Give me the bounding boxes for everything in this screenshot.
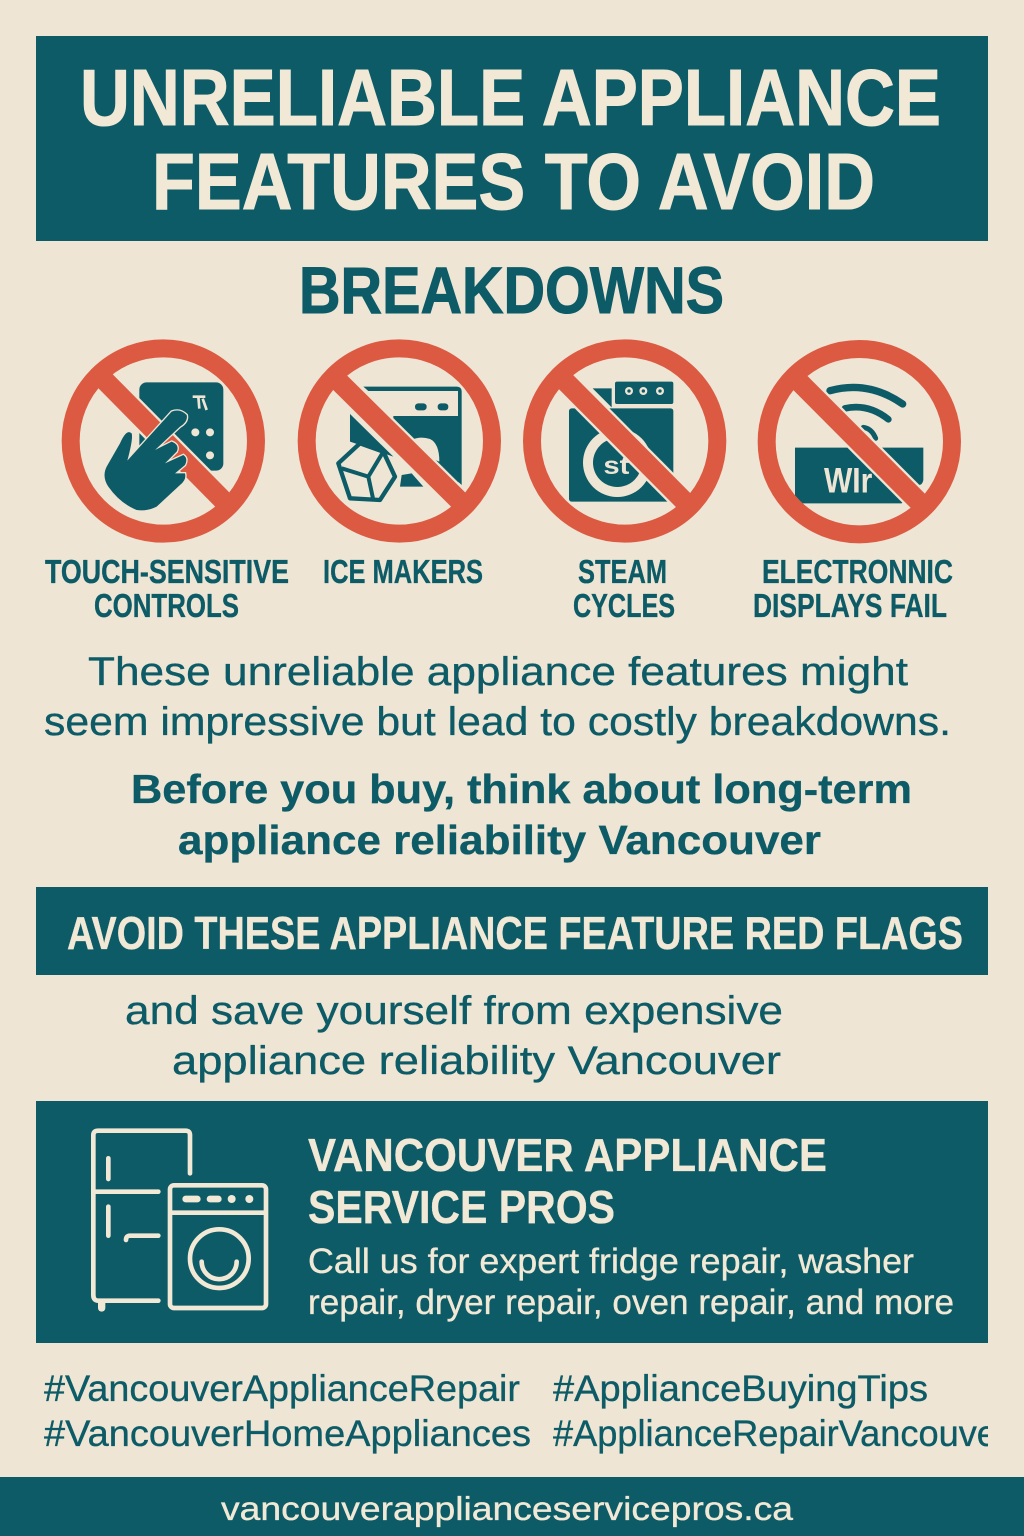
text block: intro paragraph: seem impressive but lead to costly breakdowns.: [44, 700, 951, 744]
text block: save yourself: and save yourself from expensive: [125, 989, 783, 1033]
icon: ice makers prohibited: [307, 348, 492, 534]
icon: touch-sensitive controls prohibited: [71, 348, 256, 534]
text block: intro paragraph: These unreliable appliance features might: [88, 650, 908, 694]
label: steam cycles: STEAM: [578, 553, 667, 590]
label: touch-sensitive controls: TOUCH-SENSITIVE: [45, 553, 289, 590]
panel heading: [308, 1129, 827, 1233]
label: ice makers: ICE MAKERS: [323, 553, 483, 590]
panel heading: VANCOUVER APPLIANCE: [308, 1129, 827, 1181]
hashtags: #ApplianceBuyingTips: [553, 1368, 928, 1409]
footer band with website: [0, 1477, 1024, 1536]
text block: save yourself: [125, 989, 783, 1083]
label: steam cycles: [573, 553, 675, 624]
title banner: [36, 36, 988, 241]
text block: save yourself: appliance reliability Vancouver: [172, 1039, 781, 1083]
text block: intro paragraph: [44, 650, 951, 744]
hashtags: [44, 1368, 1009, 1454]
label: electronic displays fail: DISPLAYS FAIL: [753, 587, 947, 624]
label: electronic displays fail: ELECTRONNIC: [762, 553, 953, 590]
icon: steam cycles prohibited: st: [603, 452, 630, 480]
text block: bold advice: Before you buy, think about long-term: [131, 766, 912, 812]
label: steam cycles: CYCLES: [573, 587, 675, 624]
panel text: [308, 1242, 954, 1322]
icon: electronic displays prohibited: WIr: [824, 461, 873, 500]
icon: electronic displays prohibited: [767, 349, 952, 534]
icon: fridge and washer: [93, 1131, 266, 1308]
title banner: FEATURES TO AVOID: [152, 137, 875, 226]
heading: breakdowns: BREAKDOWNS: [299, 253, 724, 327]
banner: red flags: [36, 887, 988, 975]
hashtags: #VancouverHomeAppliances: [44, 1413, 531, 1454]
label: electronic displays fail: [753, 553, 953, 624]
label: touch-sensitive controls: [45, 553, 289, 624]
panel: service pros: [36, 1101, 988, 1343]
text block: bold advice: [131, 766, 912, 863]
label: touch-sensitive controls: CONTROLS: [94, 587, 239, 624]
hashtags: #VancouverApplianceRepair: [44, 1368, 520, 1409]
footer band with website: vancouverapplianceservicepros.ca: [221, 1490, 794, 1527]
hashtags: #ApplianceRepairVancouver: [553, 1413, 1009, 1454]
text block: bold advice: appliance reliability Vancouver: [178, 817, 821, 863]
panel text: Call us for expert fridge repair, washer: [308, 1242, 914, 1281]
panel heading: SERVICE PROS: [308, 1181, 615, 1233]
icon: steam cycles prohibited: [532, 348, 717, 534]
panel text: repair, dryer repair, oven repair, and more: [308, 1283, 954, 1322]
